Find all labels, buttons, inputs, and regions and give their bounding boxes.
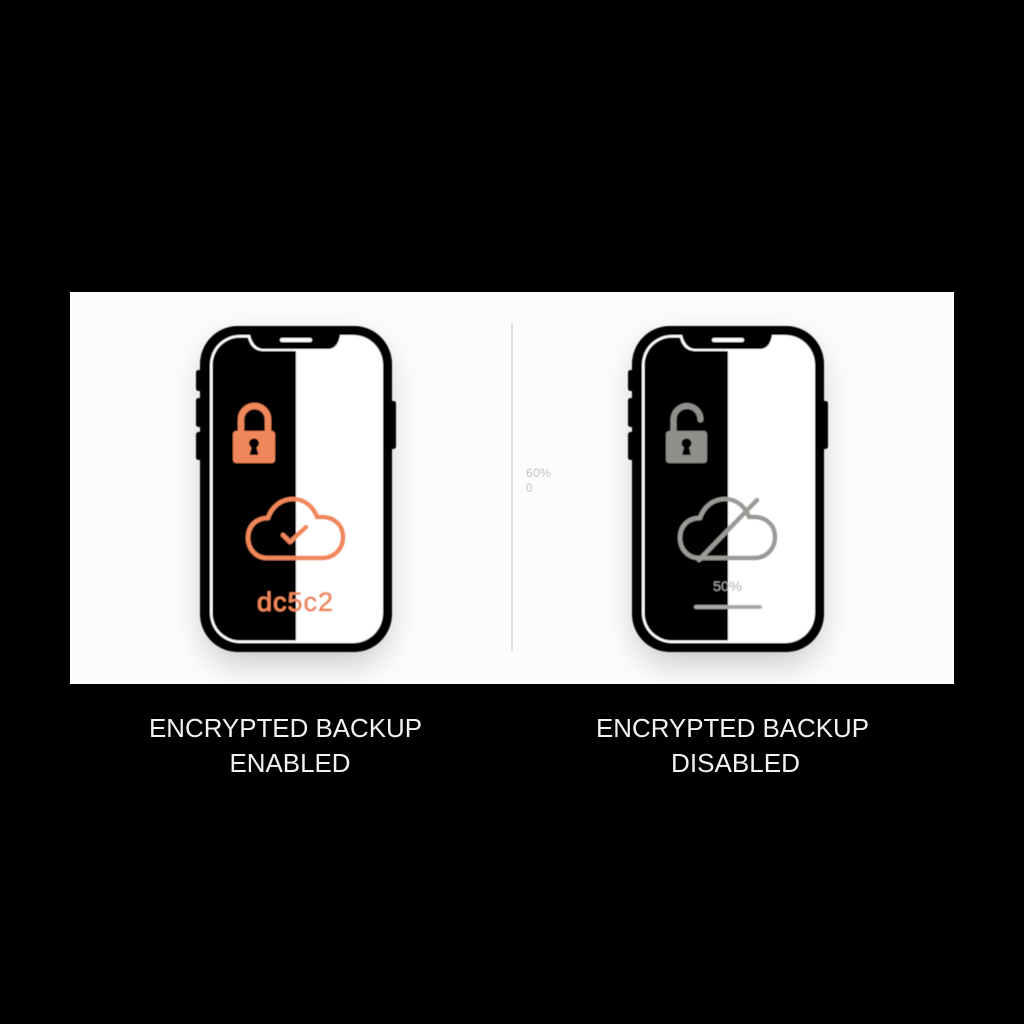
phone speaker (280, 338, 312, 342)
icon: crossed-out cloud (680, 499, 775, 560)
phone side buttons (628, 370, 828, 460)
phone body (632, 326, 824, 652)
caption: disabled: DISABLED (671, 748, 800, 778)
phone speaker (712, 338, 744, 342)
phone screen (642, 335, 815, 643)
small zero label: 0 (526, 483, 532, 495)
progress bar (694, 605, 762, 609)
icon: closed padlock (233, 406, 275, 463)
progress percent text: 50% (713, 578, 742, 594)
phone screen (210, 335, 383, 643)
icon: cloud with check mark (248, 499, 343, 558)
panel: encrypted backup disabled phone (628, 326, 828, 664)
caption: disabled: ENCRYPTED BACKUP (596, 713, 869, 743)
caption: enabled: ENABLED (230, 748, 350, 778)
phone side buttons (196, 370, 396, 460)
caption: enabled (149, 713, 422, 778)
phone body (200, 326, 392, 652)
panel: comparison card (70, 292, 954, 684)
caption: enabled: ENCRYPTED BACKUP (149, 713, 422, 743)
divider with stray labels (511, 324, 551, 651)
status code text: dc5c2 (257, 587, 333, 617)
caption: disabled (596, 713, 869, 778)
icon: open padlock (666, 406, 707, 463)
percent label: 60% (526, 468, 551, 480)
panel: encrypted backup enabled phone (196, 326, 396, 664)
